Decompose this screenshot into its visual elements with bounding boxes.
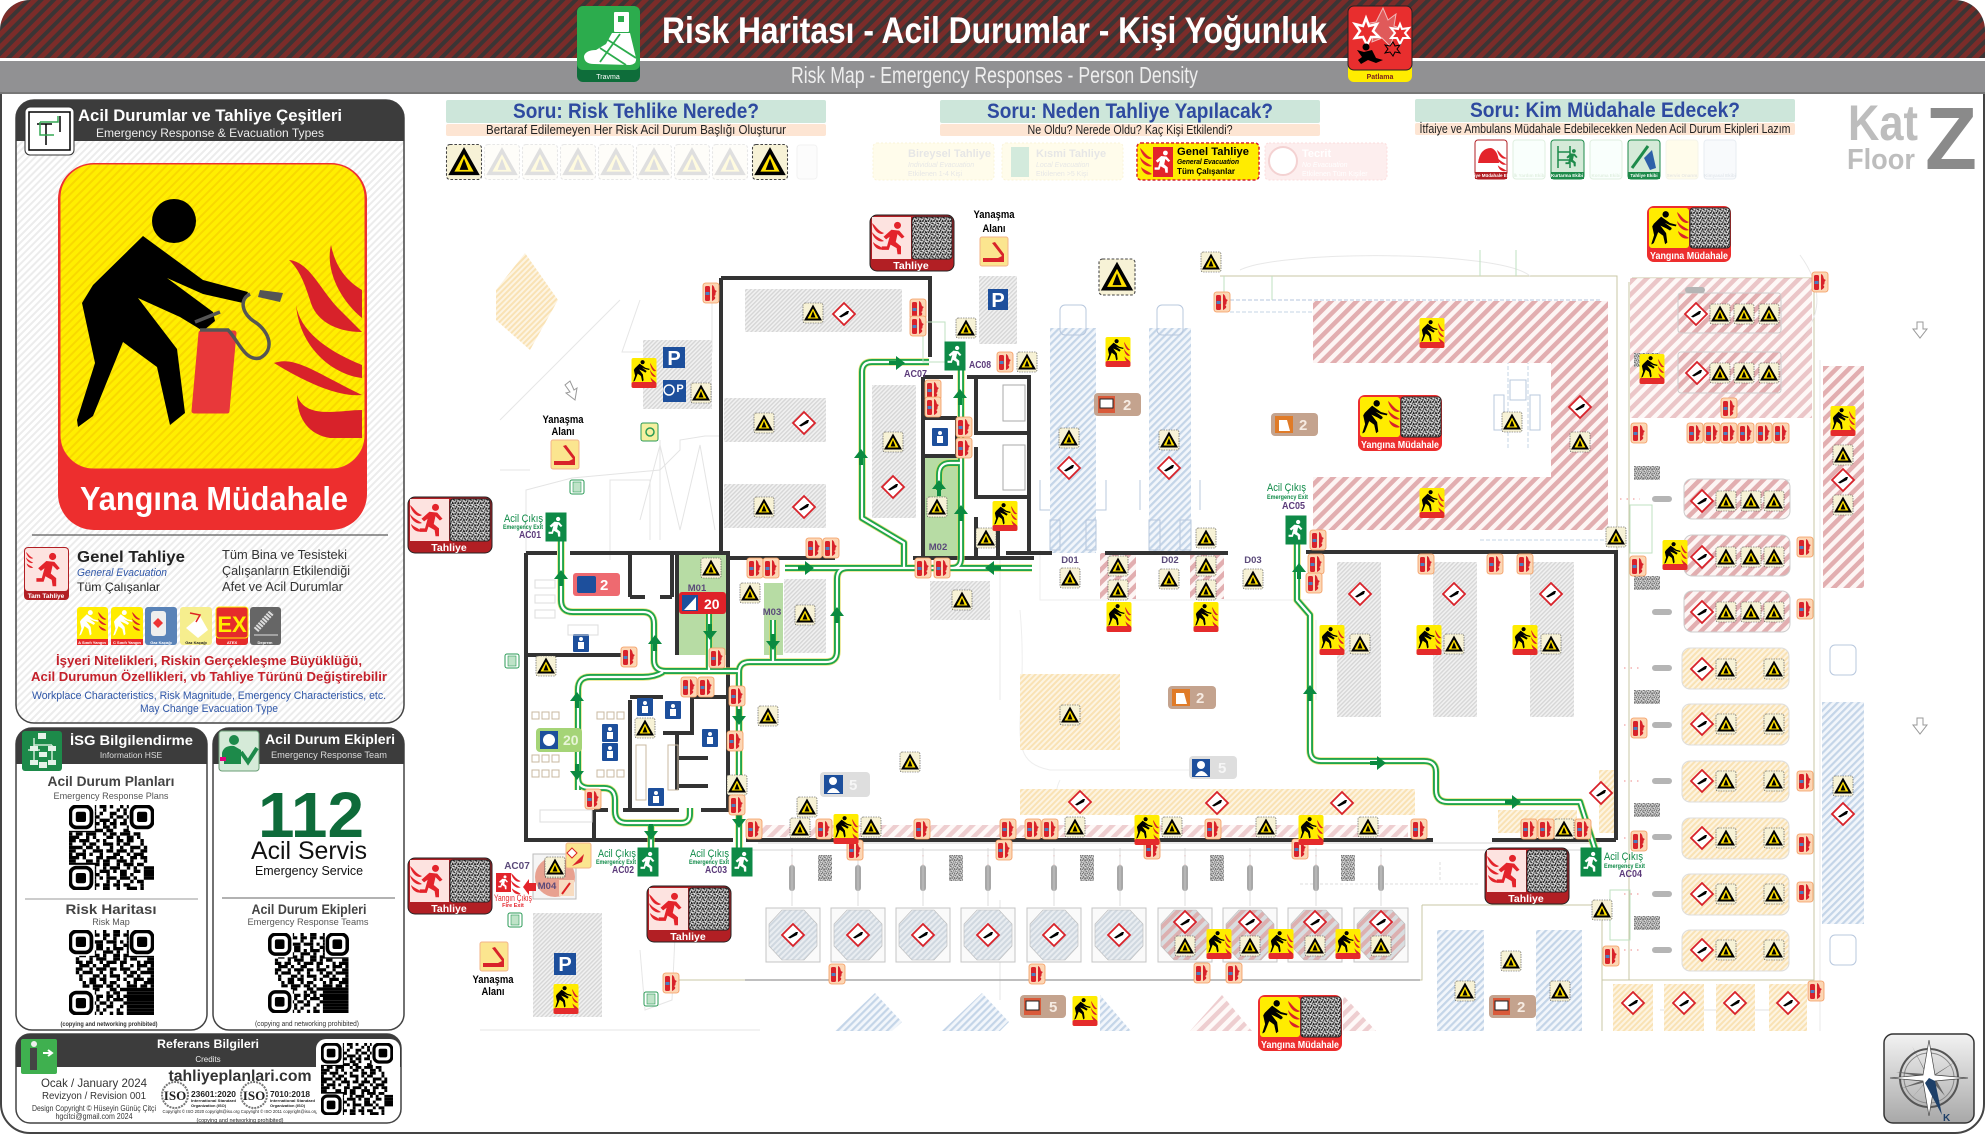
exit sign: AC05: Emergency Exit	[1267, 494, 1309, 501]
responder team selector: Kurtarma Ekibi	[1551, 173, 1583, 178]
person density badges: 2	[600, 577, 608, 594]
person density badges: 2	[1196, 690, 1204, 707]
hazard selector icons	[446, 144, 817, 180]
exit sign: AC02	[596, 848, 658, 876]
evacuation type selector: Local Evacuation	[1036, 162, 1089, 169]
docking area: left	[542, 414, 584, 469]
evacuation card: Tahliye	[670, 931, 706, 943]
panel: credits: tahliyeplanlari.com	[168, 1068, 312, 1085]
emergency number: 112	[258, 779, 364, 851]
responder team selector	[1467, 140, 1736, 179]
large sign: yangına müdahale: Yangına Müdahale	[80, 480, 348, 517]
evacuation type selector: Etkilenen Tüm Kişiler	[1302, 171, 1368, 178]
docking area: left: Alanı	[552, 426, 574, 438]
floor label: Floor	[1847, 144, 1915, 176]
revision info: Ocak / January 2024	[41, 1076, 147, 1090]
fire response card: Yangına Müdahale	[1261, 1040, 1339, 1051]
evacuation card: Tahliye	[893, 260, 929, 272]
emergency number: Acil Servis	[251, 837, 367, 865]
evacuation card	[408, 497, 492, 554]
small emergency icons: Gaz Kaçağı	[185, 640, 207, 645]
icon: team	[219, 731, 259, 771]
panel heading: Acil Durumlar ve Tahliye Çeşitleri	[78, 106, 342, 125]
question: risk	[446, 100, 826, 137]
person density badges	[536, 393, 1536, 1018]
zone labels: D01	[1061, 555, 1079, 566]
parking signs: P	[667, 348, 681, 370]
teams QR	[248, 902, 369, 1015]
panel: emergency response types	[16, 100, 404, 723]
iso logos: ISO	[243, 1088, 265, 1103]
subtitle: Risk Map - Emergency Responses - Person Density	[791, 62, 1198, 88]
evacuation type selector: Bireysel Tahliye	[908, 148, 991, 160]
warning text: İşyeri Nitelikleri, Riskin Gerçekleşme Büyüklüğü,	[56, 653, 362, 668]
zone labels: AC07	[504, 861, 530, 872]
evacuation type selector: Tecrit	[1302, 148, 1331, 160]
icon: travma: Travma	[596, 74, 620, 81]
evacuation routes	[561, 350, 1595, 849]
accessibility sign	[641, 423, 658, 441]
exit sign: AC04	[1580, 848, 1646, 880]
exit sign: AC04: Emergency Exit	[1604, 863, 1646, 870]
general evacuation text: Tüm Çalışanlar	[77, 580, 160, 594]
exit sign: AC01: AC01	[519, 530, 541, 541]
iso logos	[162, 1082, 318, 1124]
question: risk: Soru: Risk Tehlike Nerede?	[513, 100, 759, 123]
panel: ISG information	[16, 728, 207, 1030]
exit sign: AC01: Emergency Exit	[503, 524, 544, 531]
floor plan: site outlines	[480, 250, 1820, 1031]
exit sign: AC01: Acil Çıkış	[504, 513, 543, 525]
panel: credits	[16, 1034, 401, 1124]
exit sign: AC03	[689, 848, 752, 876]
panel: emergency response types: Emergency Response & Evacuation Types	[96, 126, 324, 140]
iso logos: Organization (ISO)	[270, 1103, 306, 1108]
zone labels: M03	[763, 607, 781, 618]
warning text	[31, 653, 387, 684]
evacuation type selector: Etkilenen >5 Kişi	[1036, 171, 1088, 178]
exit sign: AC02: AC02	[612, 865, 634, 876]
emergency plans QR: Emergency Response Plans	[54, 791, 169, 802]
compass: K	[1943, 1113, 1951, 1124]
person density badges: 5	[849, 777, 857, 794]
evacuation type selector: Kısmi Tahliye	[1036, 148, 1106, 160]
general evacuation text: Genel Tahliye	[77, 549, 185, 566]
fire equipment tags	[585, 272, 1828, 1001]
icon: patlama: Patlama	[1367, 74, 1394, 81]
exit sign: AC05: AC05	[1282, 501, 1305, 512]
icon: tam tahliye: Tam Tahliye	[28, 593, 65, 600]
evacuation card	[1485, 848, 1569, 905]
zone labels	[504, 542, 1262, 892]
exit sign: AC03: AC03	[705, 865, 727, 876]
evacuation description: Tüm Bina ve Tesisteki	[222, 548, 347, 562]
exit sign: AC04: Acil Çıkış	[1604, 851, 1643, 863]
small emergency icons	[77, 607, 281, 645]
M04 area	[533, 854, 576, 899]
building walls	[526, 278, 1616, 840]
revision info: Revizyon / Revision 001	[42, 1090, 146, 1102]
restaurant furniture	[532, 385, 1025, 822]
person density badges: 20	[563, 732, 579, 748]
question: responders: İtfaiye ve Ambulans Müdahale Edebilecekken Neden Acil Durum Ekipleri Lazım	[1420, 121, 1790, 136]
icon: patlama	[1348, 6, 1412, 82]
revision info: Design Copyright © Hüseyin Günüç Çitçi	[32, 1104, 156, 1113]
direction arrows	[565, 322, 1927, 734]
icon: flow chart	[22, 731, 62, 771]
evacuation type selector: Etkilenen 1-4 Kişi	[908, 171, 963, 178]
panel: ISG information: Information HSE	[100, 750, 163, 760]
responder team selector: Tahliye Ekibi	[1630, 173, 1658, 178]
evacuation type selector: Individual Evacuation	[908, 162, 974, 169]
fire response card: Yangına Müdahale	[1361, 440, 1439, 451]
M04 icons	[545, 857, 574, 896]
fire exit: Yangın Çıkış	[494, 893, 532, 903]
flammable tag	[566, 843, 591, 868]
evacuation card	[647, 886, 731, 943]
panel icon	[25, 107, 74, 155]
parking signs: P	[676, 383, 684, 395]
floor label: Z	[1925, 89, 1977, 188]
exit sign: AC08	[904, 342, 991, 380]
evacuation card: Tahliye	[431, 542, 467, 554]
tanks	[766, 908, 1408, 962]
person density badges: 2	[1123, 397, 1131, 414]
panel: ISG information: İSG Bilgilendirme	[70, 732, 193, 748]
evacuation type selector: Tüm Çalışanlar	[1177, 166, 1236, 176]
panel: emergency team	[213, 728, 404, 1030]
emergency plans QR	[48, 774, 174, 892]
docking area: bottom	[472, 942, 514, 998]
docking area: bottom: Alanı	[482, 986, 504, 998]
evacuation type selector	[873, 143, 1387, 180]
evacuation description: Afet ve Acil Durumlar	[222, 580, 343, 594]
small emergency icons: C Sınıfı Yangın	[113, 640, 142, 645]
pumps and equipment	[789, 287, 1705, 953]
responder team selector: Kimyasal Ekibi	[1704, 173, 1736, 178]
evacuation type selector: Genel Tahliye	[1177, 146, 1249, 158]
small emergency icons: Gaz Kaçağı	[150, 640, 172, 645]
fire exit: Fire Exit	[502, 903, 524, 909]
evacuation description	[222, 548, 350, 594]
route arrows	[554, 356, 1521, 840]
gas hazard diamonds	[793, 303, 1854, 1014]
responder team selector: Koruma Ekibi	[1591, 173, 1621, 178]
credits icon	[21, 1039, 57, 1074]
general evacuation text: General Evacuation	[77, 567, 167, 579]
general evacuation text	[77, 549, 185, 594]
iso logos: International Standard	[270, 1098, 316, 1103]
zone labels: M02	[929, 542, 947, 553]
iso logos: 7010:2018	[270, 1090, 311, 1099]
question: responders	[1415, 99, 1795, 136]
evacuation card	[408, 858, 492, 915]
floor label	[1847, 89, 1977, 188]
fire response card	[1258, 995, 1342, 1051]
exit sign: AC05	[1267, 482, 1309, 544]
small emergency icons: ATEX	[227, 640, 238, 645]
question: evacuation: Soru: Neden Tahliye Yapılacak?	[987, 100, 1273, 123]
iso logos: International Standard	[191, 1098, 237, 1103]
emergency plans QR: Acil Durum Planları	[48, 774, 174, 789]
small exit markers	[505, 480, 658, 1006]
exit sign: AC08: AC08	[969, 360, 991, 371]
exit sign: AC08: AC07	[904, 369, 927, 380]
panel: emergency team: (copying and networking prohibited)	[255, 1021, 359, 1028]
person density badges: 2	[1299, 417, 1307, 434]
parking signs	[554, 289, 1008, 976]
parking signs: P	[991, 290, 1005, 312]
risk map QR: Risk Map	[92, 917, 130, 927]
revision info	[32, 1076, 156, 1121]
floor label: Kat	[1848, 95, 1918, 151]
fire response signs	[554, 318, 1856, 1026]
emergency number	[251, 779, 367, 878]
risk map QR: Risk Haritası	[66, 901, 156, 917]
question: risk: Bertaraf Edilemeyen Her Risk Acil Durum Başlığı Oluşturur	[486, 122, 787, 137]
docking area: bottom: Yanaşma	[472, 974, 514, 986]
warning text: Acil Durumun Özellikleri, vb Tahliye Türünü Değiştirebilir	[31, 669, 387, 684]
panel: emergency team: Emergency Response Team	[271, 750, 387, 761]
hatched zones	[496, 253, 1864, 1031]
person density badges: 5	[1218, 760, 1226, 777]
fire response card	[1647, 206, 1731, 262]
docking area: left: Yanaşma	[542, 414, 584, 426]
responder team selector: İtfaiye Müdahale Ekibi	[1467, 172, 1515, 178]
question: evacuation	[940, 100, 1320, 137]
panel: credits: Credits	[195, 1055, 221, 1064]
title: Risk Haritası - Acil Durumlar - Kişi Yoğunluk	[662, 10, 1327, 51]
panel: credits: Referans Bilgileri	[157, 1037, 259, 1051]
exit sign: AC03: Acil Çıkış	[690, 848, 729, 860]
question: responders: Soru: Kim Müdahale Edecek?	[1470, 99, 1740, 122]
revision info: hgcitci@gmail.com 2024	[56, 1112, 133, 1121]
warning signs on the map	[536, 252, 1853, 1001]
credits QR	[316, 1039, 400, 1119]
zone labels: M04	[538, 881, 557, 892]
fire response card: Yangına Müdahale	[1650, 251, 1728, 262]
iso logos: Copyright © ISO 2020 copyright@iso.org Copyright © ISO 2011 copyright@iso.org	[162, 1108, 318, 1114]
iso logos: (copying and networking prohibited)	[196, 1118, 284, 1124]
english note: May Change Evacuation Type	[140, 703, 278, 715]
large sign: yangına müdahale	[58, 163, 367, 530]
iso logos: ISO	[164, 1088, 186, 1103]
stair zones	[679, 458, 958, 655]
small emergency icons: EX	[217, 612, 247, 637]
responder team selector: İlk Yardım Ekibi	[1512, 172, 1546, 178]
evacuation type selector: General Evacuation	[1177, 157, 1239, 166]
english note: Workplace Characteristics, Risk Magnitude, Emergency Characteristics, etc.	[32, 690, 386, 702]
emergency number: Emergency Service	[255, 863, 363, 878]
small emergency icons: Deprem	[258, 640, 273, 645]
exit sign: AC05: Acil Çıkış	[1267, 482, 1306, 494]
exit sign: AC02: Emergency Exit	[596, 859, 637, 866]
responder team selector: Servis Onarım	[1667, 173, 1697, 178]
evacuation description: Çalışanların Etkilendiği	[222, 564, 350, 578]
evacuation card: Tahliye	[1508, 893, 1544, 905]
fire response card	[1358, 395, 1442, 451]
evacuation type selector: No Evacuation	[1302, 162, 1348, 169]
compass	[1884, 1034, 1974, 1124]
question: evacuation: Ne Oldu? Nerede Oldu? Kaç Kişi Etkilendi?	[1028, 122, 1232, 137]
exit sign: AC03: Emergency Exit	[689, 859, 730, 866]
icon: travma	[577, 6, 640, 82]
evacuation card: Tahliye	[431, 903, 467, 915]
english note	[32, 690, 386, 715]
header band	[0, 0, 1985, 94]
small emergency icons: A Sınıfı Yangın	[78, 640, 106, 645]
zone labels: D03	[1244, 555, 1262, 566]
teams QR: Acil Durum Ekipleri	[252, 902, 366, 917]
teams QR: Emergency Response Teams	[248, 917, 369, 928]
exit sign: AC02: Acil Çıkış	[598, 848, 636, 860]
iso logos: 23601:2020	[191, 1090, 237, 1099]
person density badges: 20	[704, 596, 720, 612]
person density badges: 2	[1517, 999, 1525, 1016]
icon: tam tahliye	[24, 547, 69, 600]
person density badges: 5	[1049, 999, 1057, 1016]
facility icons	[573, 428, 948, 806]
zone labels: D02	[1161, 555, 1179, 566]
docking area: top: Yanaşma	[974, 209, 1015, 221]
evacuation card	[870, 215, 954, 272]
docking area: top: Alanı	[982, 223, 1006, 235]
exit sign: AC04: AC04	[1619, 869, 1642, 880]
risk map QR	[66, 901, 156, 1017]
exit sign: AC01	[503, 512, 566, 542]
fire exit	[494, 873, 536, 909]
panel: ISG information: (copying and networking prohibited)	[60, 1021, 158, 1028]
panel: emergency team: Acil Durum Ekipleri	[265, 731, 395, 747]
parking signs: P	[558, 954, 572, 976]
iso logos: Organization (ISO)	[191, 1103, 227, 1108]
docking area: top	[974, 209, 1015, 266]
zone labels: M01	[688, 583, 707, 594]
